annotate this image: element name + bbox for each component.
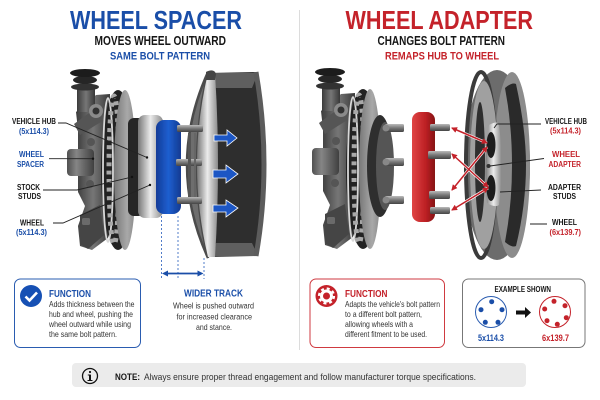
function text: Adapts the vehicle's bolt pattern bbox=[345, 299, 440, 309]
knuckle and brake rotor bbox=[312, 68, 381, 249]
label: wheel adapter: WHEEL bbox=[552, 149, 580, 159]
label: stock studs bbox=[17, 176, 133, 201]
label: adapter studs: ADAPTER bbox=[548, 182, 582, 192]
wheel barrel bbox=[187, 70, 265, 258]
red adapter bbox=[412, 112, 451, 222]
label: adapter studs bbox=[500, 182, 582, 201]
blue spacer bbox=[156, 120, 181, 214]
icon: check mark bbox=[20, 285, 42, 307]
tagline: same bolt pattern: SAME BOLT PATTERN bbox=[110, 50, 210, 62]
label: wheel spacer bbox=[17, 149, 94, 169]
adapter callouts bbox=[490, 116, 587, 237]
title: wheel adapter: WHEEL ADAPTER bbox=[346, 5, 533, 35]
subtitle: changes bolt pattern: CHANGES BOLT PATTERN bbox=[378, 34, 505, 48]
hub silver ring bbox=[128, 115, 163, 218]
wider track text: WIDER TRACK bbox=[184, 288, 243, 300]
function text: allowing wheels with a bbox=[345, 319, 413, 329]
spacer callouts bbox=[12, 116, 151, 237]
spacer assembly illustration bbox=[67, 69, 265, 258]
wider track dimension bbox=[162, 216, 204, 279]
function text bbox=[48, 288, 135, 339]
hub face and studs bbox=[367, 115, 404, 217]
wider track text bbox=[173, 288, 254, 332]
tagline: remaps hub to wheel: REMAPS HUB TO WHEEL bbox=[385, 50, 499, 62]
function text bbox=[345, 288, 440, 339]
icon: gear bbox=[316, 285, 338, 307]
label: vehicle hub: (5x114.3) bbox=[550, 126, 581, 136]
label: wheel: (6x139.7) bbox=[550, 227, 581, 237]
title: wheel spacer: WHEEL SPACER bbox=[70, 5, 242, 35]
wider track text: and stance. bbox=[196, 322, 232, 332]
label: wheel spacer: WHEEL bbox=[19, 149, 44, 159]
black arrow bbox=[516, 307, 531, 318]
outward arrows bbox=[213, 130, 238, 217]
label: wheel: WHEEL bbox=[20, 218, 44, 228]
studs bbox=[176, 125, 203, 204]
note text: Always ensure proper thread engagement and follow manufacturer torque specifications. bbox=[144, 372, 476, 383]
label: wheel spacer: SPACER bbox=[17, 159, 45, 169]
label: vehicle hub: VEHICLE HUB bbox=[12, 116, 56, 126]
wider track text: Wheel is pushed outward bbox=[173, 301, 254, 311]
label: wheel adapter bbox=[490, 149, 582, 169]
label: adapter studs: STUDS bbox=[553, 191, 576, 201]
label: vehicle hub: (5x114.3) bbox=[19, 126, 49, 136]
pattern label 6x139.7: 6x139.7 bbox=[542, 333, 569, 343]
example heading: EXAMPLE SHOWN bbox=[494, 284, 551, 294]
function text: the same bolt pattern. bbox=[49, 329, 117, 339]
panel: example shown bbox=[462, 279, 585, 348]
label: stock studs: STOCK bbox=[17, 182, 41, 192]
function text: hub and wheel, pushing the bbox=[49, 309, 133, 319]
label: wheel bbox=[16, 184, 151, 237]
note bar bbox=[72, 363, 526, 387]
note text: NOTE: bbox=[115, 372, 140, 383]
red mapping arrows bbox=[452, 128, 488, 210]
left header: wheel spacer bbox=[70, 5, 242, 62]
pattern label 5x114.3: 5x114.3 bbox=[478, 333, 504, 343]
icon: info bbox=[82, 368, 98, 384]
function text: different fitment to be used. bbox=[345, 329, 427, 339]
red 6-lug pattern bbox=[540, 296, 570, 328]
function text: Adds thickness between the bbox=[49, 299, 135, 309]
label: wheel: WHEEL bbox=[552, 217, 577, 227]
label: stock studs: STUDS bbox=[18, 191, 41, 201]
label: wheel adapter: ADAPTER bbox=[548, 159, 582, 169]
label: wheel bbox=[530, 217, 581, 237]
function text: to a different bolt pattern, bbox=[345, 309, 422, 319]
function text: FUNCTION bbox=[345, 288, 388, 300]
function text: wheel outward while using bbox=[48, 319, 131, 329]
panel: adapter function bbox=[310, 279, 444, 348]
right header: wheel adapter bbox=[346, 5, 533, 62]
panel: spacer function bbox=[14, 279, 140, 348]
divider between panels bbox=[298, 10, 300, 350]
wheel with new bolt pattern bbox=[464, 70, 530, 260]
knuckle and brake rotor bbox=[67, 69, 136, 250]
label: vehicle hub bbox=[494, 116, 587, 136]
wider track text: for increased clearance bbox=[176, 312, 252, 322]
label: wheel: (5x114.3) bbox=[16, 227, 47, 237]
blue 5-lug pattern bbox=[476, 296, 506, 328]
function text: FUNCTION bbox=[49, 288, 91, 300]
subtitle: moves wheel outward: MOVES WHEEL OUTWARD bbox=[94, 34, 226, 48]
adapter assembly illustration bbox=[312, 68, 530, 260]
label: vehicle hub bbox=[12, 116, 148, 159]
